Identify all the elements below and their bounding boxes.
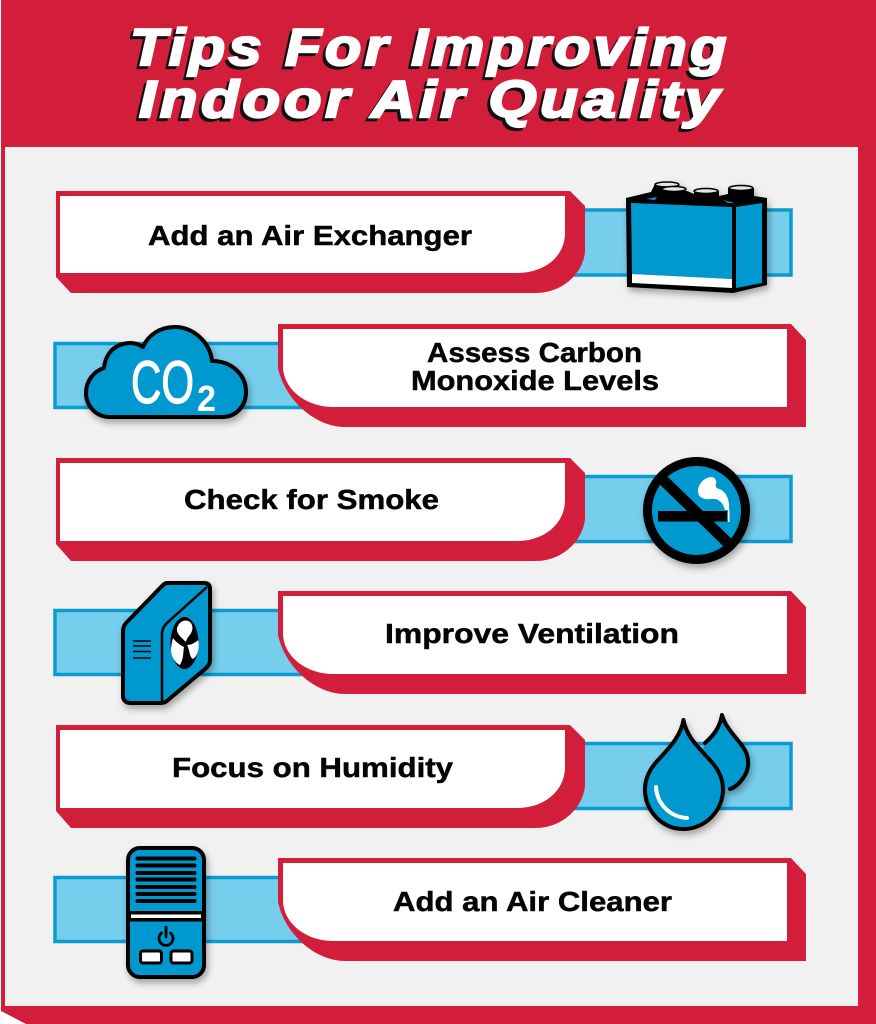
icon: no smoking bbox=[648, 462, 746, 560]
card: Improve Ventilation bbox=[385, 618, 679, 649]
card: Focus on Humidity bbox=[172, 752, 453, 783]
card bbox=[278, 324, 806, 427]
icon: air cleaner bbox=[128, 848, 204, 977]
title: Tips For Improving bbox=[130, 19, 730, 77]
icon: air exchanger bbox=[626, 182, 767, 293]
row 1: Add an Air Exchanger bbox=[56, 182, 791, 293]
title bbox=[127, 19, 730, 132]
icon: water drops bbox=[645, 715, 748, 829]
card: Check for Smoke bbox=[184, 484, 439, 515]
card: Add an Air Exchanger bbox=[148, 220, 472, 251]
row 2: Assess Carbon Monoxide Levels bbox=[55, 324, 806, 427]
card bbox=[56, 191, 585, 293]
title: Tips For Improving bbox=[127, 22, 727, 80]
card bbox=[278, 591, 806, 694]
card bbox=[56, 725, 585, 828]
icon: CO2 cloud: CO bbox=[131, 349, 194, 416]
card bbox=[56, 458, 585, 561]
card: Add an Air Cleaner bbox=[393, 886, 672, 917]
row 5: Focus on Humidity bbox=[56, 715, 791, 829]
icon: CO2 cloud bbox=[86, 327, 246, 419]
row 4: Improve Ventilation bbox=[55, 583, 806, 703]
card: Monoxide Levels bbox=[411, 365, 659, 396]
icon: ventilation unit bbox=[123, 583, 210, 703]
title: Indoor Air Quality bbox=[136, 74, 720, 132]
row 3: Check for Smoke bbox=[56, 458, 791, 561]
title: Indoor Air Quality bbox=[139, 71, 723, 129]
card bbox=[278, 858, 806, 961]
card: Assess Carbon bbox=[427, 337, 642, 368]
icon: CO2 cloud: 2 bbox=[197, 378, 216, 419]
row 6: Add an Air Cleaner bbox=[55, 848, 806, 977]
